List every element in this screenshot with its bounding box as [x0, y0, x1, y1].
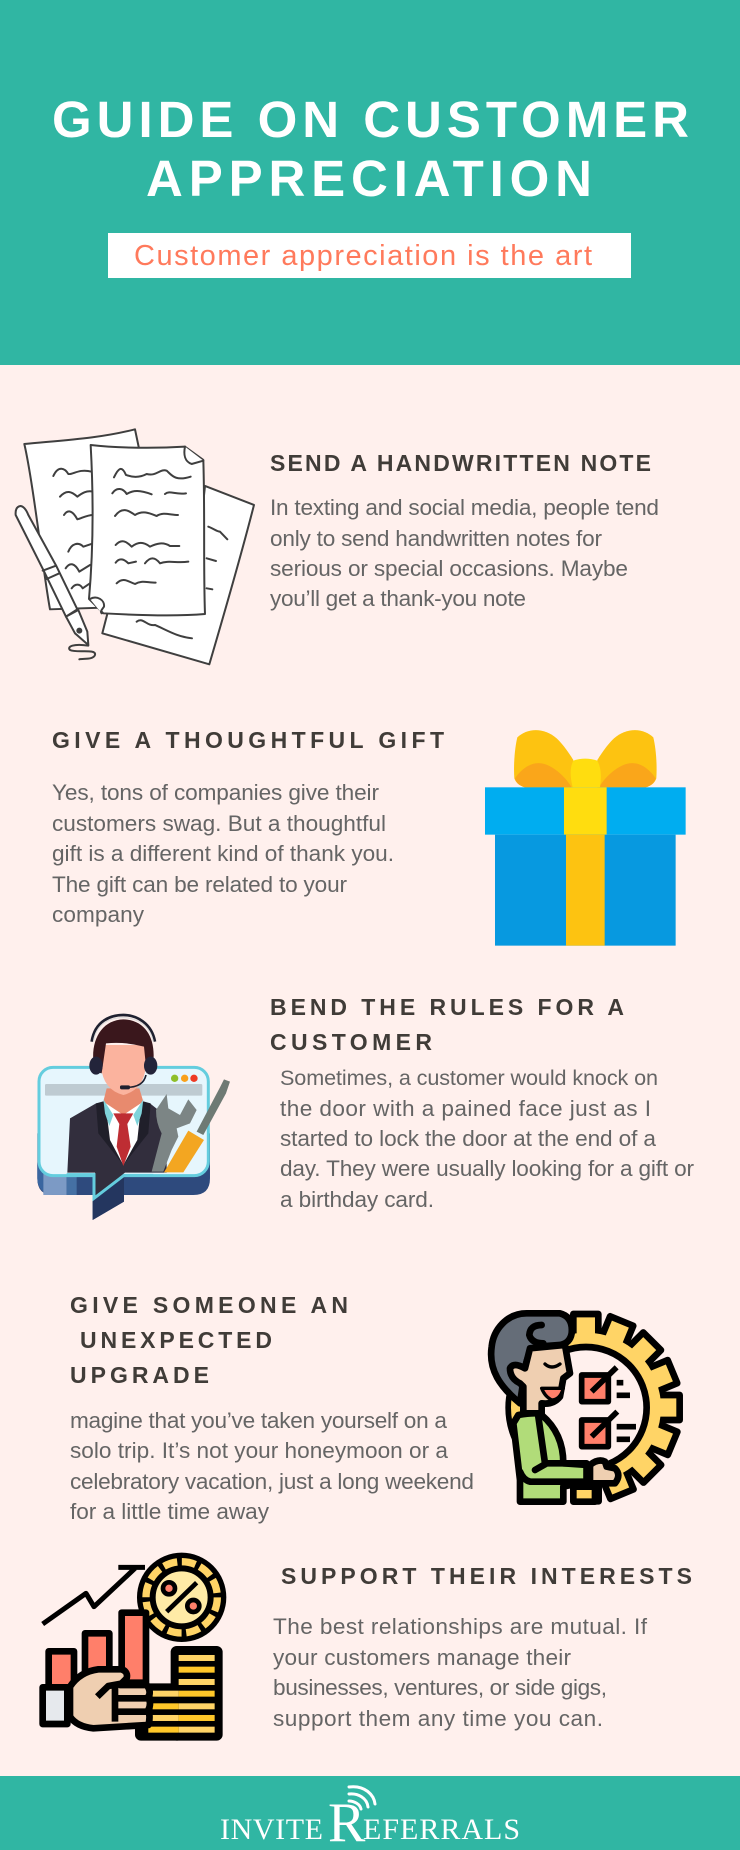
text: send a handwritten note: you’ll get a thank-you note [270, 586, 526, 611]
text: unexpected upgrade: magine that you’ve taken yourself on a [70, 1408, 447, 1433]
title [52, 91, 689, 207]
text: bend the rules: started to lock the door at the end of a [280, 1126, 656, 1151]
text: send a handwritten note: In texting and social media, people tend [270, 495, 659, 520]
subtitle box: Customer appreciation is the art [134, 240, 592, 272]
text: give a thoughtful gift: The gift can be related to your [52, 872, 347, 897]
text: support their interests [273, 1614, 648, 1731]
text: send a handwritten note: only to send handwritten notes for [270, 526, 602, 551]
icon: person with gear and checklist [491, 1313, 680, 1502]
text: unexpected upgrade [70, 1408, 474, 1524]
heading: give a thoughtful gift: GIVE A THOUGHTFUL GIFT [52, 727, 444, 753]
heading: give someone an unexpected upgrade: GIVE SOMEONE AN [70, 1292, 348, 1318]
text: give a thoughtful gift: Yes, tons of companies give their [52, 780, 379, 805]
text: bend the rules [280, 1065, 694, 1212]
heading: give someone an unexpected upgrade: UNEXPECTED [80, 1327, 272, 1353]
text: support their interests: The best relationships are mutual. If [273, 1614, 648, 1639]
text: bend the rules: day. They were usually looking for a gift or [280, 1156, 694, 1181]
header band [0, 0, 740, 365]
heading: send a handwritten note: SEND A HANDWRITTEN NOTE [270, 450, 651, 476]
icon: gift box [485, 730, 686, 946]
text: send a handwritten note: serious or special occasions. Maybe [270, 556, 628, 581]
text: unexpected upgrade: celebratory vacation, just a long weekend [70, 1469, 474, 1494]
logo: InviteReferrals: INVITE [220, 1813, 323, 1846]
text: send a handwritten note [270, 495, 659, 611]
icon: handwritten notes and pen [16, 429, 254, 664]
text: unexpected upgrade: solo trip. It’s not your honeymoon or a [70, 1438, 448, 1463]
subtitle box [108, 233, 631, 278]
text: bend the rules: Sometimes, a customer would knock on [280, 1065, 658, 1090]
heading: bend the rules: CUSTOMER [270, 1029, 432, 1055]
heading: bend the rules [270, 994, 624, 1055]
text: support their interests: businesses, ventures, or side gigs, [273, 1675, 607, 1700]
text: bend the rules: a birthday card. [280, 1187, 434, 1212]
footer band [0, 1776, 740, 1850]
text: unexpected upgrade: for a little time away [70, 1499, 270, 1524]
icon: hand with coins and growth chart [43, 1553, 226, 1737]
heading: give someone an unexpected upgrade: UPGRADE [70, 1362, 209, 1388]
text: bend the rules: the door with a pained face just as I [280, 1096, 651, 1121]
heading: bend the rules: BEND THE RULES FOR A [270, 994, 624, 1020]
title: APPRECIATION [146, 150, 592, 207]
text: give a thoughtful gift: company [52, 902, 145, 927]
heading: support their interests: SUPPORT THEIR INTERESTS [281, 1563, 692, 1589]
text: support their interests: your customers manage their [273, 1645, 571, 1670]
text: give a thoughtful gift: customers swag. But a thoughtful [52, 811, 386, 836]
text: support their interests: support them any time you can. [273, 1706, 603, 1731]
title: GUIDE ON CUSTOMER [52, 91, 689, 148]
heading: give someone an unexpected upgrade [70, 1292, 348, 1388]
logo: InviteReferrals [220, 1787, 520, 1850]
logo: InviteReferrals: EFERRALS [363, 1813, 520, 1846]
icon: support agent with tools [37, 1015, 230, 1220]
text: give a thoughtful gift: gift is a different kind of thank you. [52, 841, 394, 866]
text: give a thoughtful gift [52, 780, 394, 927]
